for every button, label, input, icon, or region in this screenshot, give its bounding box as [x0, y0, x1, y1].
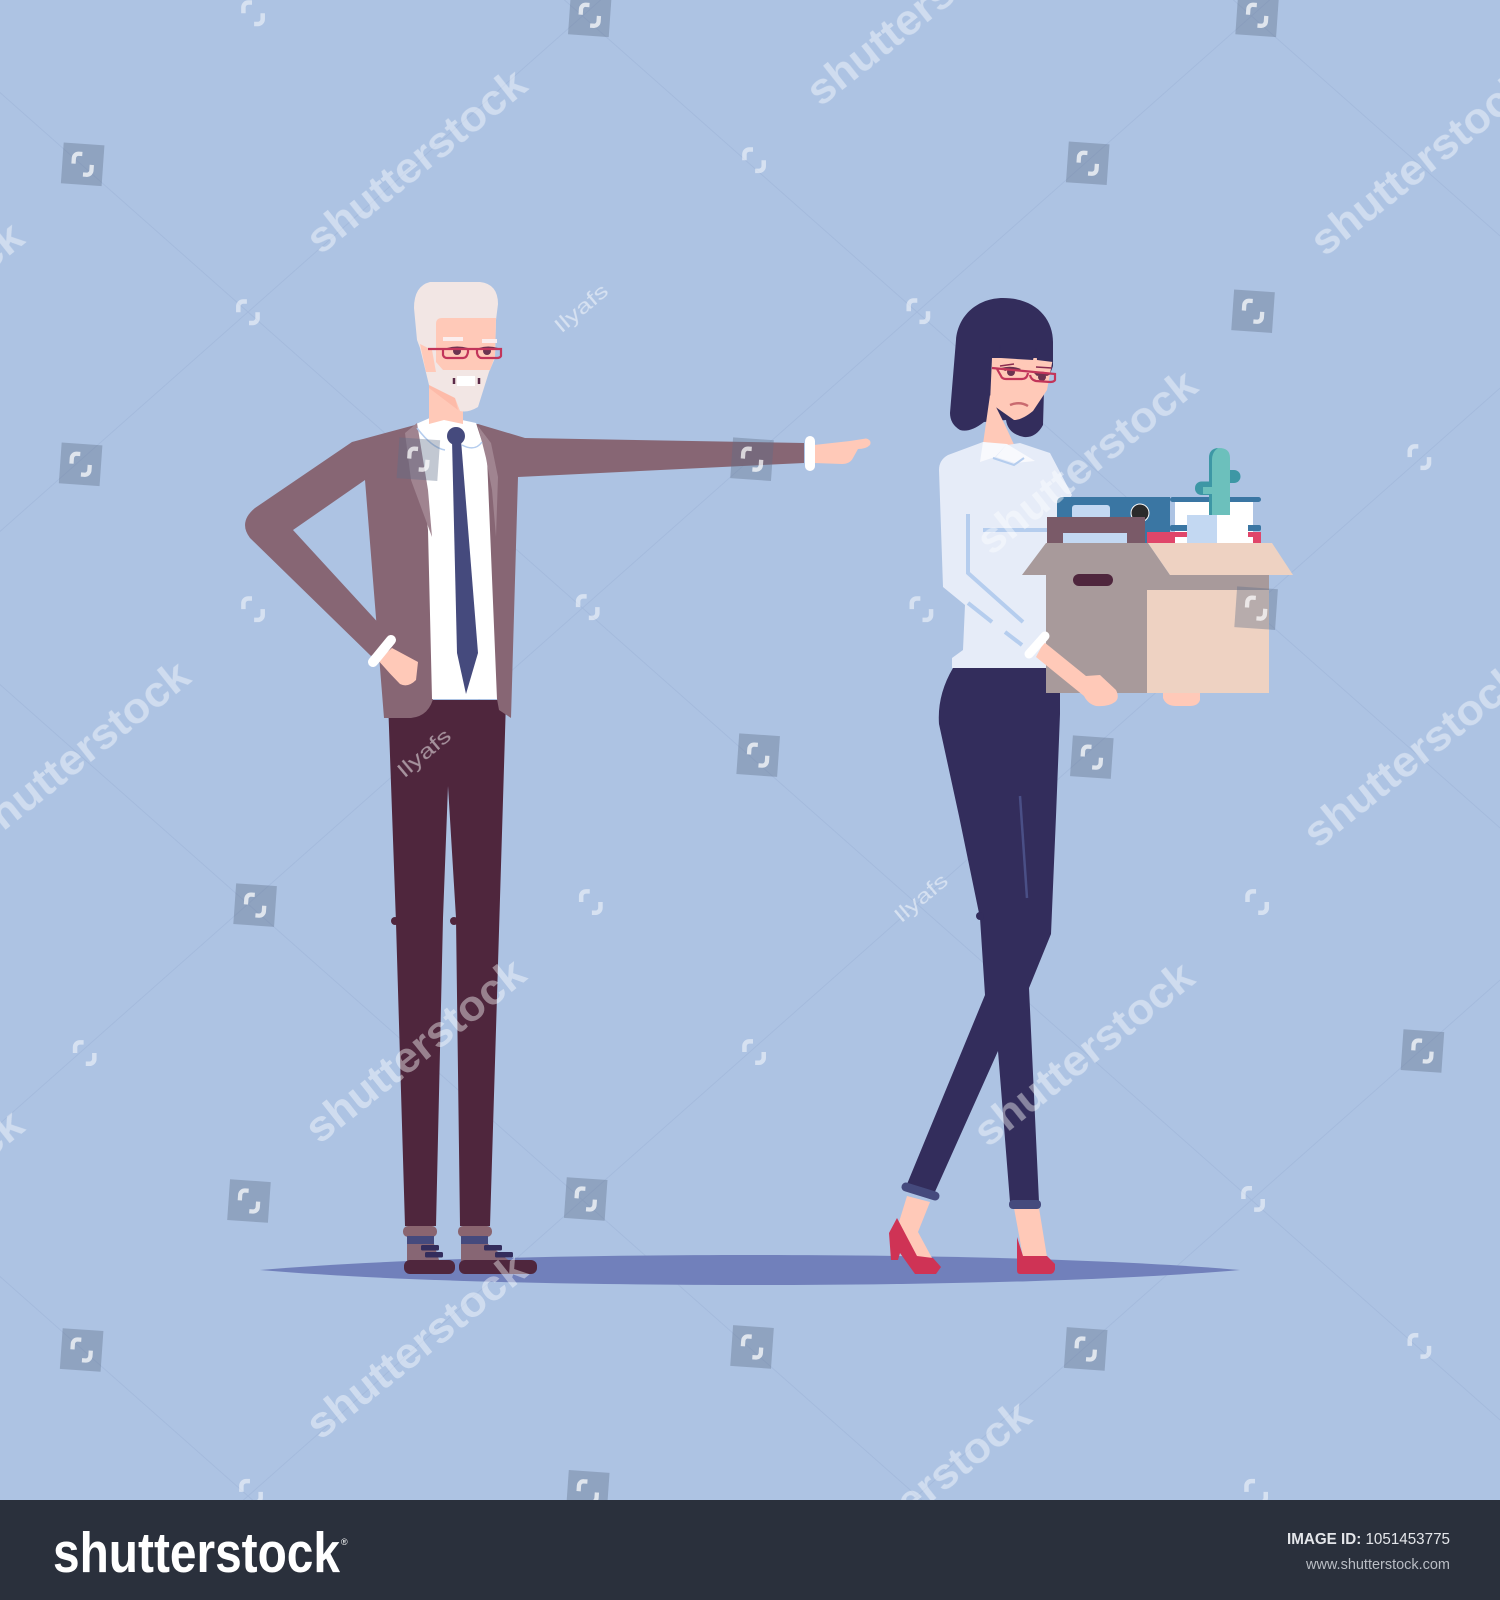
- woman face: [990, 358, 1053, 420]
- contributor name watermarks: Ilyafs: [393, 725, 456, 782]
- footer banner: [0, 1500, 1500, 1600]
- woman neck: [983, 395, 1022, 462]
- image id: IMAGE ID: 1051453775: [1287, 1531, 1450, 1548]
- shutterstock text watermarks: shutterstock: [801, 1390, 1040, 1595]
- shutterstock text watermarks: shutterstock: [967, 360, 1206, 564]
- shutterstock text watermarks: shutterstock: [296, 949, 535, 1153]
- cardboard box: [1022, 543, 1293, 693]
- glasses: [428, 349, 501, 358]
- blue binder: [1057, 497, 1170, 543]
- footer logo: shutterstock: [53, 1521, 340, 1585]
- woman: dismissed employee with box: [889, 298, 1293, 1274]
- face: [436, 318, 496, 370]
- eyebrows: [443, 339, 497, 341]
- man tie: [447, 427, 478, 694]
- woman cuff: [1029, 636, 1045, 654]
- shutterstock text watermarks: shutterstock: [964, 952, 1203, 1156]
- cactus: [1195, 448, 1240, 516]
- woman back hair: [950, 298, 1053, 437]
- woman blouse: [939, 442, 1072, 668]
- man left hand: [378, 648, 418, 685]
- woman bangs: [990, 345, 1053, 362]
- man lapels: [405, 423, 498, 537]
- woman blouse fold lines: [968, 514, 1050, 645]
- website: www.shutterstock.com: [1305, 1556, 1450, 1573]
- woman trousers: [905, 668, 1060, 1202]
- hair and beard: [414, 282, 498, 412]
- photo frame: [1047, 517, 1145, 543]
- neck: [429, 378, 463, 424]
- contributor name watermarks: [393, 280, 953, 927]
- eyes: [447, 346, 468, 350]
- woman mouth: [1010, 403, 1028, 406]
- ground shadow: [260, 1255, 1240, 1285]
- man shoes: [403, 1226, 537, 1274]
- woman collar: [980, 442, 1035, 463]
- man cuffs: [373, 441, 810, 662]
- contributor name watermarks: Ilyafs: [890, 870, 953, 927]
- woman forearm and hand: [1036, 642, 1118, 706]
- man right hand pointing: [814, 438, 870, 464]
- shutterstock text watermarks: shutterstock: [297, 59, 536, 263]
- man jacket and arms: [245, 424, 804, 718]
- mouth: [457, 376, 475, 386]
- man shirt: [416, 417, 497, 699]
- registered mark: ®: [341, 1537, 348, 1547]
- woman other hand: [1163, 690, 1200, 706]
- woman feet and heels: [889, 1187, 1055, 1274]
- man: angry boss pointing: [245, 282, 870, 1274]
- woman glasses and eyes: [992, 364, 1055, 382]
- man trousers: [388, 700, 506, 1226]
- man head: [414, 282, 501, 424]
- shutterstock text watermarks: shutterstock: [297, 1245, 536, 1449]
- contributor name watermarks: Ilyafs: [550, 280, 613, 338]
- pot: [1187, 515, 1217, 543]
- man collar lines: [417, 428, 482, 450]
- box contents: [1047, 448, 1261, 543]
- box handle slot: [1073, 574, 1113, 586]
- stacked books: [1170, 497, 1261, 502]
